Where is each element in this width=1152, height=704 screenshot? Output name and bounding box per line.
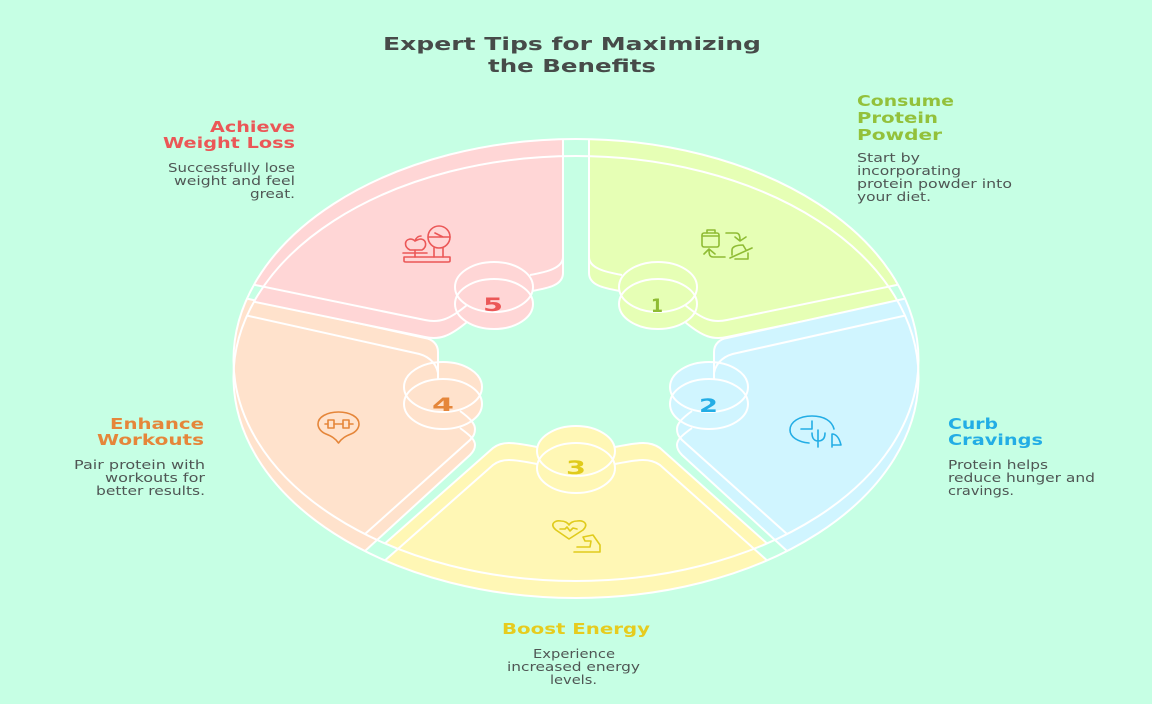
panel: segment 5 achieve weight loss bbox=[254, 139, 563, 338]
number 5: 5 bbox=[483, 294, 503, 316]
text: boost energy: levels. bbox=[550, 673, 597, 687]
text: enhance workouts bbox=[74, 415, 205, 498]
text: consume protein powder: Consume bbox=[857, 92, 954, 110]
panel: segment 4 enhance workouts bbox=[234, 299, 482, 551]
text: boost energy bbox=[502, 620, 650, 687]
text: achieve weight loss: great. bbox=[250, 187, 295, 201]
text: curb cravings: Protein helps bbox=[948, 458, 1048, 472]
icon: heart and flexed arm bbox=[553, 521, 600, 552]
text: consume protein powder: incorporating bbox=[857, 164, 961, 178]
text: consume protein powder: Powder bbox=[857, 126, 943, 144]
title: the Benefits bbox=[488, 57, 656, 77]
text: achieve weight loss: Successfully lose bbox=[168, 161, 295, 175]
outer rim of the wheel bbox=[234, 139, 918, 598]
text: boost energy: increased energy bbox=[507, 660, 640, 674]
text: consume protein powder: your diet. bbox=[857, 190, 931, 204]
text: curb cravings bbox=[948, 415, 1095, 498]
text: enhance workouts: Pair protein with bbox=[74, 458, 205, 472]
text: consume protein powder: protein powder into bbox=[857, 177, 1012, 191]
text: enhance workouts: workouts for bbox=[105, 471, 205, 485]
icon: apple and weighing scale bbox=[403, 226, 450, 262]
text: achieve weight loss: weight and feel bbox=[174, 174, 295, 188]
panel: segment 2 curb cravings bbox=[670, 299, 918, 551]
icon: heart-shaped craving plate and fork bbox=[790, 416, 841, 447]
icon: protein jar and scoop cycle bbox=[702, 230, 752, 259]
panel: segment 1 consume protein powder bbox=[589, 139, 898, 338]
text: curb cravings: Cravings bbox=[948, 431, 1043, 449]
panel: segment 3 boost energy bbox=[385, 426, 767, 598]
text: enhance workouts: Workouts bbox=[97, 431, 204, 449]
text: achieve weight loss: Achieve bbox=[210, 118, 295, 136]
text: curb cravings: Curb bbox=[948, 415, 998, 433]
text: boost energy: Experience bbox=[533, 647, 615, 661]
text: curb cravings: reduce hunger and bbox=[948, 471, 1095, 485]
icon: dumbbell in speech bubble bbox=[318, 412, 359, 443]
text: curb cravings: cravings. bbox=[948, 484, 1014, 498]
number 2: 2 bbox=[699, 395, 718, 417]
title bbox=[383, 35, 761, 77]
text: achieve weight loss: Weight Loss bbox=[163, 134, 295, 152]
text: consume protein powder: Protein bbox=[857, 109, 938, 127]
text: boost energy: Boost Energy bbox=[502, 620, 650, 638]
number 1: 1 bbox=[651, 295, 663, 317]
number 3: 3 bbox=[566, 457, 586, 479]
text: consume protein powder: Start by bbox=[857, 151, 920, 165]
text: enhance workouts: better results. bbox=[96, 484, 205, 498]
text: achieve weight loss bbox=[163, 118, 295, 201]
title: Expert Tips for Maximizing bbox=[383, 35, 761, 55]
text: consume protein powder bbox=[857, 92, 1012, 204]
number 4: 4 bbox=[432, 394, 454, 416]
text: enhance workouts: Enhance bbox=[110, 415, 204, 433]
